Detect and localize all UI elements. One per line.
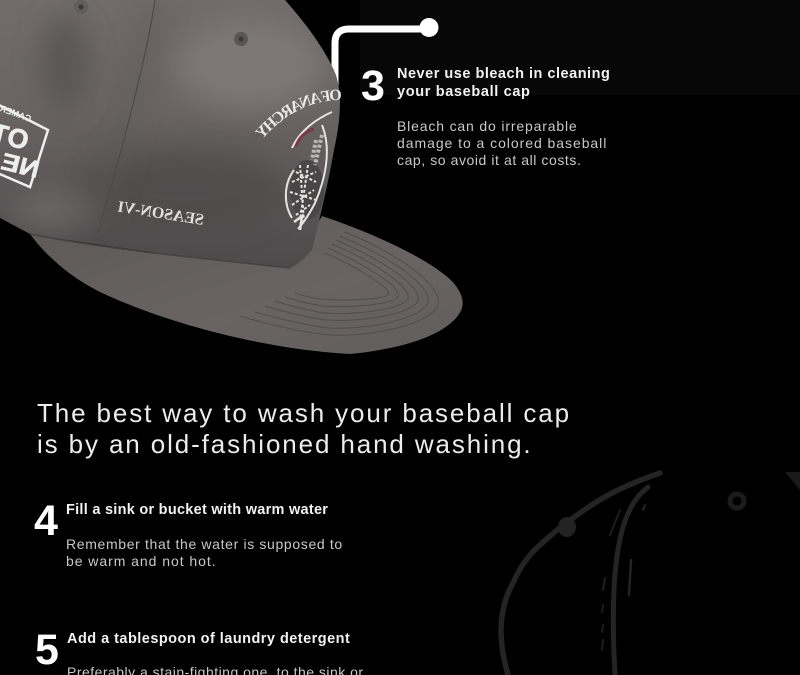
ghost cap outline [501,472,800,675]
season text: SEASON-VI [116,199,205,229]
seam [98,0,155,232]
patch text [0,103,42,183]
step 3 body: Bleach can do irreparable [397,118,578,134]
intro statement: The best way to wash your baseball cap [37,398,571,428]
number 3: 3 [361,62,385,110]
step 5 [35,629,364,675]
logo arc text: OF ANARCHY [254,90,341,138]
step 3 body: damage to a colored baseball [397,134,607,150]
step 4 body: be warm and not hot. [66,553,217,569]
step 4 body [66,536,343,569]
visor stitching [240,232,438,335]
crown shading [10,0,325,232]
step 3 heading [397,66,610,100]
step 3 heading: Never use bleach in cleaning [397,66,610,82]
intro statement: is by an old-fashioned hand washing. [37,428,533,458]
patch on side [0,103,48,187]
step 3 heading: your baseball cap [397,84,531,100]
step 4 [34,497,343,569]
step 3 body [397,118,607,168]
step 3 [361,62,610,168]
step 4 body: Remember that the water is supposed to [66,536,343,552]
number 4: 4 [34,497,58,545]
intro statement [37,398,571,458]
eyelets [234,32,248,46]
crown [0,0,340,268]
background shade: top right [360,0,800,95]
step 4 heading: Fill a sink or bucket with warm water [66,502,328,518]
connector line with dot [332,18,438,86]
reaper emblem [286,112,332,230]
band edge [30,234,290,268]
visor [30,216,463,354]
step 5 heading: Add a tablespoon of laundry detergent [67,631,350,647]
step 3 body: cap, so avoid it at all costs. [397,152,581,168]
